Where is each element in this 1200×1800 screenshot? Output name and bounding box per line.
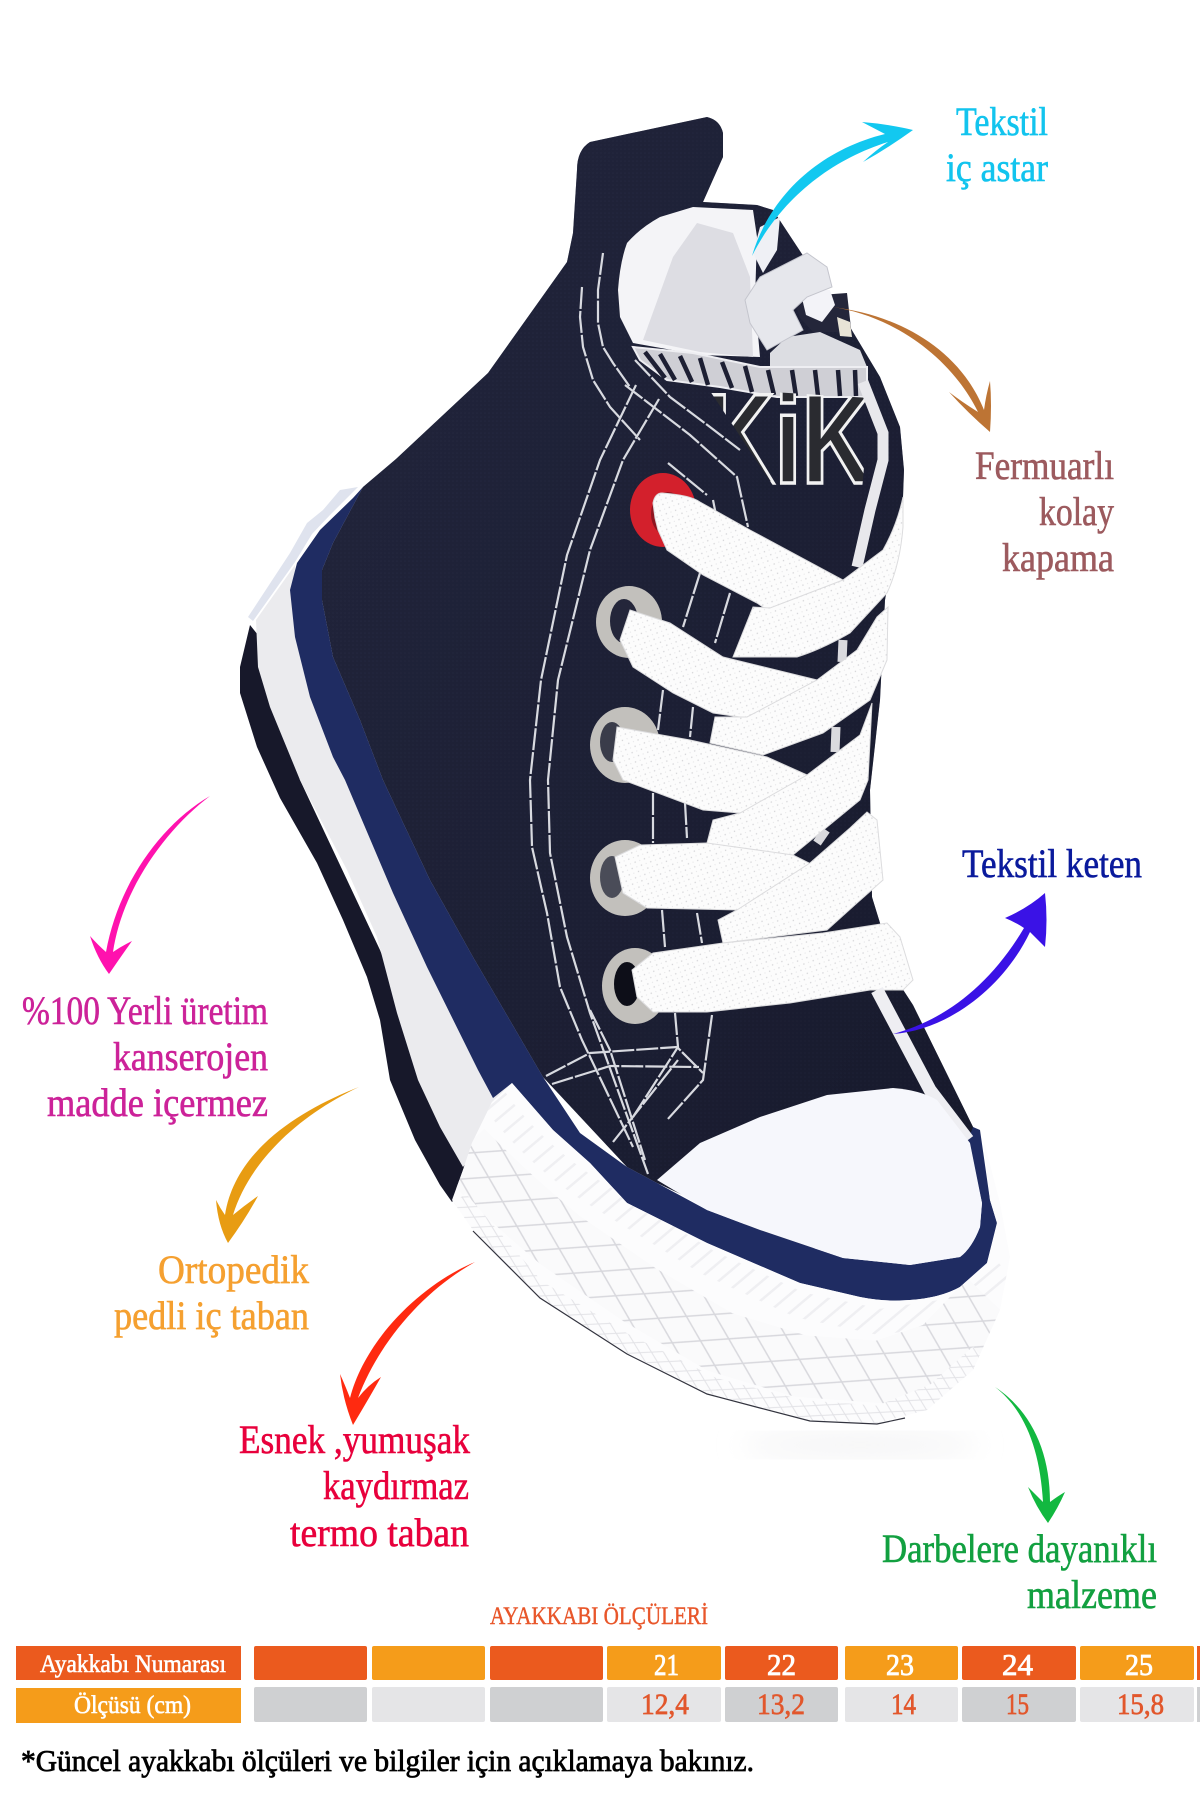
label: orthopedic insole: Ortopedik: [158, 1247, 309, 1292]
eyelet: silver 3: [590, 840, 660, 916]
toe cap: [657, 1088, 982, 1265]
label: zipper: [975, 443, 1114, 580]
arrow: red: [340, 1262, 475, 1425]
row: measurements: 12,4: [641, 1688, 689, 1721]
label: domestic production: %100 Yerli üretim: [22, 988, 268, 1033]
arrow: blue to textile: [893, 893, 1046, 1034]
size table heading: AYAKKABI ÖLÇÜLERİ: [490, 1603, 708, 1630]
row: measurements: 15: [1006, 1688, 1029, 1721]
shadow under toe: [740, 1433, 980, 1457]
label: textile lining: iç astar: [946, 145, 1048, 190]
row: measurements: 13,2: [757, 1688, 805, 1721]
label: flexible sole: [239, 1417, 470, 1555]
lining: [618, 207, 760, 357]
label: zipper: kapama: [1002, 535, 1114, 580]
zipper end: [837, 317, 852, 337]
label: zipper: kolay: [1039, 489, 1114, 534]
zipper fluff white: [800, 290, 835, 322]
zipper tape: [753, 217, 780, 273]
row: measurements: 15,8: [1117, 1688, 1164, 1721]
zipper pull: [745, 253, 832, 350]
row label: measure: Ölçüsü (cm): [74, 1692, 191, 1719]
row label: measure: [16, 1688, 241, 1723]
shoe: [240, 117, 1010, 1457]
sole white stripe: [256, 565, 525, 1167]
row: sizes: 23: [886, 1647, 914, 1682]
label: impact resistant: [882, 1526, 1157, 1617]
inner mesh: [643, 223, 753, 357]
arrow: cyan to lining: [752, 122, 913, 256]
label: flexible sole: kaydırmaz: [323, 1463, 469, 1508]
row: sizes: 25: [1125, 1647, 1153, 1682]
label: textile lining: [946, 99, 1048, 190]
canvas upper: [322, 117, 976, 1250]
eyelet: red: [630, 473, 696, 547]
toe foxing: [452, 1083, 1010, 1424]
label: zipper: Fermuarlı: [975, 443, 1114, 488]
arrow: orange: [216, 1087, 359, 1243]
lining below zipper: [770, 332, 867, 367]
row: measurements: 14: [891, 1688, 916, 1721]
stitching: [530, 253, 748, 1174]
footnote: *Güncel ayakkabı ölçüleri ve bilgiler için açıklamaya bakınız.: [21, 1743, 754, 1778]
label: impact resistant: Darbelere dayanıklı: [882, 1526, 1157, 1571]
size table: [16, 1646, 1200, 1723]
sole dark base: [240, 625, 480, 1202]
inner white strips: [817, 640, 843, 843]
label: flexible sole: Esnek ,yumuşak: [239, 1417, 470, 1462]
label: flexible sole: termo taban: [290, 1510, 469, 1555]
label: domestic production: madde içermez: [47, 1080, 268, 1125]
arrow: magenta: [90, 796, 210, 974]
label: orthopedic insole: pedli iç taban: [114, 1293, 309, 1338]
zipper fluff: [793, 293, 852, 337]
collar band: [633, 347, 867, 397]
row: sizes: 21: [654, 1647, 679, 1682]
label: impact resistant: malzeme: [1027, 1572, 1157, 1617]
row: sizes: 22: [767, 1647, 796, 1682]
row: sizes: [254, 1646, 1200, 1682]
toe strip: [877, 990, 968, 1140]
label: orthopedic insole: [114, 1247, 309, 1338]
label: textile lining: Tekstil: [956, 99, 1048, 144]
brand logo: KiK: [704, 368, 872, 511]
eyelet: silver 1: [596, 586, 662, 658]
foxing bottom edge: [473, 1231, 905, 1424]
navy foxing band: [290, 487, 997, 1301]
label: domestic production: kanserojen: [113, 1034, 268, 1079]
side lining strip: [857, 382, 883, 567]
heel counter white: [248, 487, 358, 621]
laces: [613, 493, 913, 1012]
canvas shading: [322, 117, 976, 1250]
eyelet: silver 2: [590, 707, 660, 783]
row: sizes: 24: [1002, 1647, 1034, 1682]
arrow: brown to zipper: [832, 307, 991, 432]
eyelet: silver 4: [602, 948, 668, 1024]
label: domestic production: [22, 988, 268, 1125]
row label: shoe number: Ayakkabı Numarası: [40, 1651, 226, 1678]
row: measurements: [254, 1687, 1200, 1722]
label: textile linen: Tekstil keten: [962, 841, 1142, 886]
arrow: green: [995, 1387, 1065, 1523]
